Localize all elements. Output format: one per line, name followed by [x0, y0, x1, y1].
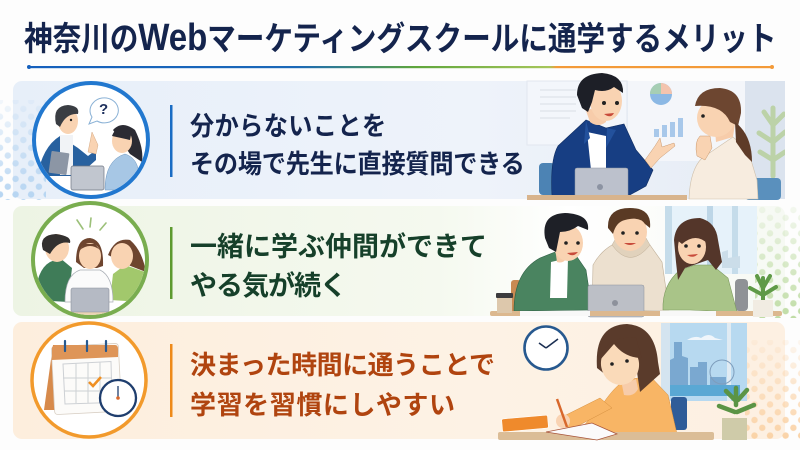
- panel background: [13, 322, 785, 439]
- icon circle: teacher and student: ?: [99, 101, 108, 118]
- benefit text: 一緒に学ぶ仲間ができて: [190, 231, 487, 262]
- panel background: [13, 206, 785, 316]
- student and wall clock illustration: [498, 323, 754, 440]
- icon circle: teacher and student: [34, 83, 148, 197]
- office scene illustration: [527, 73, 785, 200]
- icon circle: calendar and clock: [32, 323, 146, 437]
- benefit text: [190, 231, 487, 301]
- benefit text: [190, 112, 525, 179]
- panel background: [13, 81, 785, 199]
- accent bar: [170, 105, 172, 177]
- benefit text: やる気が続く: [190, 270, 347, 301]
- accent bar: [170, 227, 172, 299]
- halftone dots: left of row 1: [0, 100, 46, 200]
- icon circle: three learners: [33, 203, 147, 319]
- benefit text: 分からないことを: [190, 112, 386, 141]
- panel: peers benefit: [13, 203, 800, 319]
- halftone dots: right of row 3: [745, 340, 800, 440]
- panel: question benefit: [0, 73, 785, 200]
- benefit text: 決まった時間に通うことで: [190, 350, 495, 380]
- benefit text: その場で先生に直接質問できる: [190, 150, 525, 179]
- title underline: [27, 65, 774, 69]
- title: 神奈川のWebマーケティングスクールに通学するメリット: [24, 16, 777, 59]
- benefit text: 学習を習慣にしやすい: [190, 390, 455, 420]
- accent bar: [170, 344, 172, 417]
- panel: schedule benefit: [13, 322, 800, 440]
- halftone dots: right of row 2: [755, 206, 800, 318]
- friends studying illustration: [490, 206, 782, 317]
- benefit text: [190, 350, 495, 420]
